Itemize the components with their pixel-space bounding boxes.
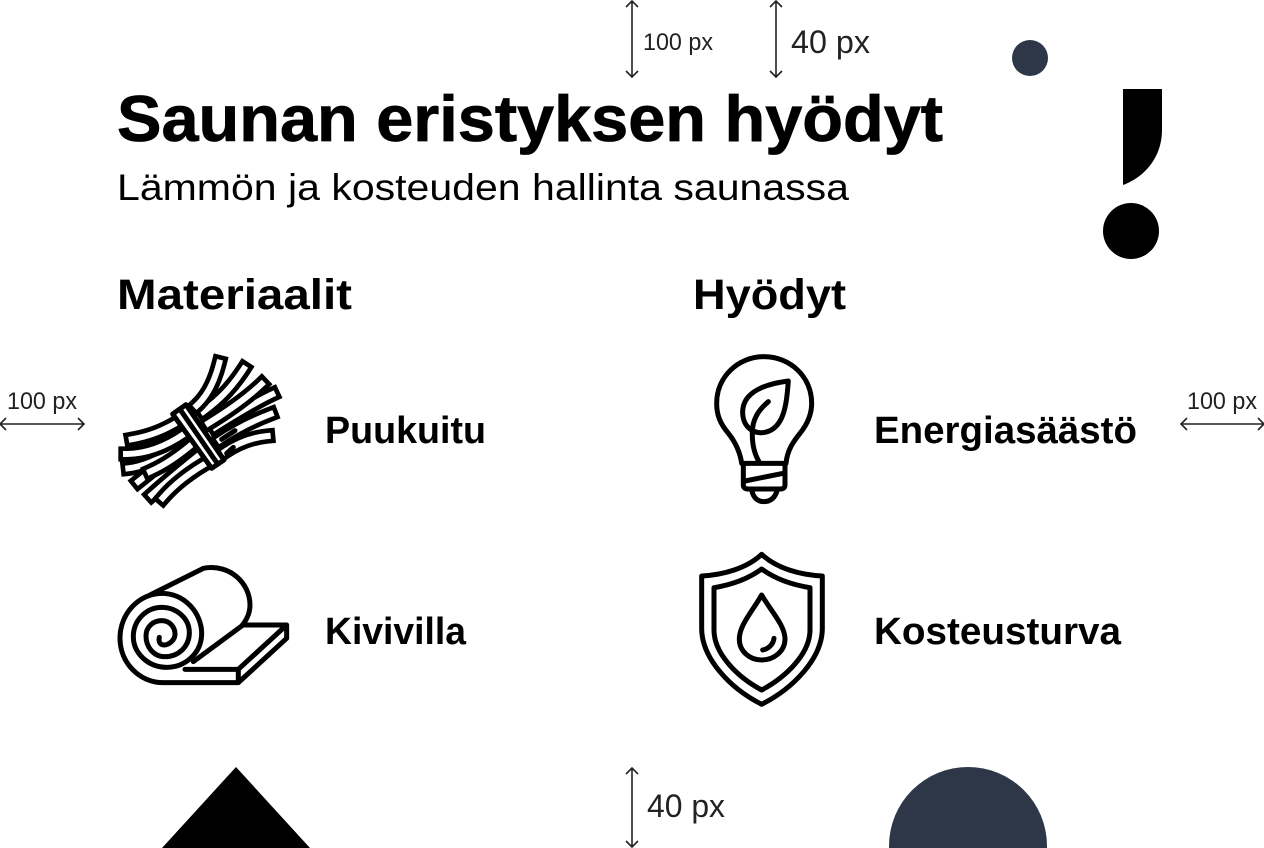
label: Puukuitu: Puukuitu [325, 410, 486, 452]
icon: wood fibre bundle [126, 363, 272, 498]
label: Kosteusturva: Kosteusturva [874, 611, 1122, 653]
icon: shield with water drop [702, 554, 822, 704]
dimension arrow: top 100 px [626, 1, 638, 77]
decorative navy dot [1012, 40, 1048, 76]
heading: Hyödyt: Hyödyt [693, 271, 846, 319]
exclamation mark shape [1103, 89, 1162, 259]
decorative black triangle [162, 767, 310, 848]
dimension arrow: left 100 px [0, 418, 84, 430]
decorative navy semicircle [889, 767, 1047, 848]
dimension label: left 100 px: 100 px [7, 388, 77, 415]
dimension arrow: bottom 40 px [626, 768, 638, 847]
icon: light bulb with leaf [717, 357, 812, 502]
dimension label: top 100 px: 100 px [643, 29, 713, 56]
heading: Materiaalit: Materiaalit [117, 271, 352, 319]
label: Kivivilla: Kivivilla [325, 611, 467, 653]
subtitle: Lämmön ja kosteuden hallinta saunassa [117, 167, 849, 208]
dimension arrow: top 40 px [770, 1, 782, 77]
icon: rock wool roll [120, 568, 287, 683]
dimension arrow: right 100 px [1181, 418, 1264, 430]
title: Saunan eristyksen hyödyt [117, 82, 943, 155]
label: Energiasäästö: Energiasäästö [874, 410, 1137, 452]
dimension label: bottom 40 px: 40 px [647, 788, 725, 824]
dimension label: top 40 px: 40 px [791, 24, 870, 60]
dimension label: right 100 px: 100 px [1187, 388, 1257, 415]
